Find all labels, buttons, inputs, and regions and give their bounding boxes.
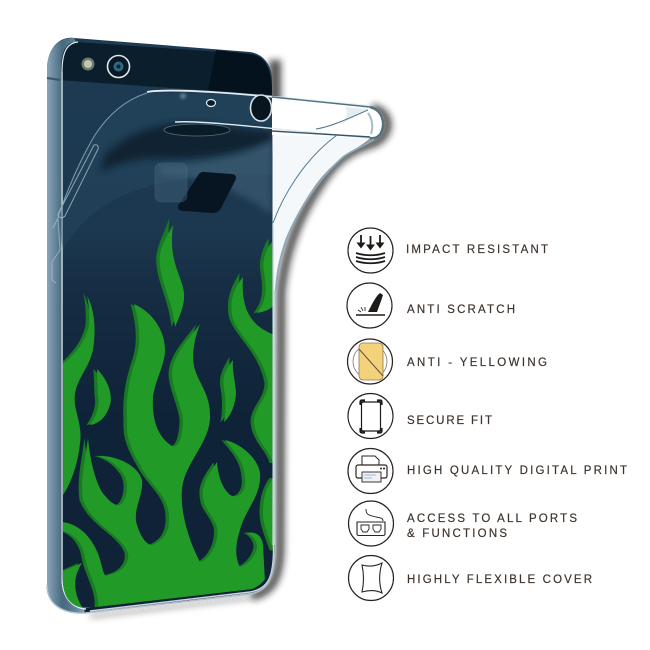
feature: secure fit (348, 394, 492, 438)
flames dark layer (63, 218, 273, 608)
flap shadow on phone (100, 122, 272, 172)
flap tint (58, 202, 72, 249)
flames light layer (63, 225, 273, 608)
phone with clear case (47, 38, 387, 625)
feature: anti yellowing (348, 339, 547, 384)
feature: access to all ports: ACCESS TO ALL PORTS (407, 513, 577, 525)
feature: anti scratch (347, 283, 515, 328)
side button cover (52, 145, 98, 283)
feature: anti scratch: ANTI SCRATCH (407, 304, 515, 316)
feature: impact resistant (348, 228, 548, 273)
lighter panel reflection (160, 140, 272, 215)
case drop shadow (90, 60, 387, 616)
camera lens (108, 56, 130, 78)
slot in case (164, 124, 230, 136)
side frame (47, 38, 85, 613)
feature: high quality digital print: HIGH QUALITY DIGITAL PRINT (407, 465, 627, 477)
flap curved left edge (58, 93, 147, 218)
reflected case corner (155, 163, 187, 202)
feature: high quality digital print (348, 448, 627, 494)
feature: access to all ports (348, 501, 577, 546)
small hole ring (206, 100, 216, 106)
right case edge (90, 225, 274, 611)
flash (82, 58, 94, 70)
case flap on phone (58, 122, 272, 249)
camera hole ring (250, 95, 272, 121)
feature: access to all ports: & FUNCTIONS (407, 528, 507, 540)
feature: highly flexible cover: HIGHLY FLEXIBLE COVER (407, 574, 592, 586)
top glass band (58, 41, 272, 95)
feature: impact resistant: IMPACT RESISTANT (406, 244, 548, 256)
flames pattern (63, 218, 273, 608)
white flap outside phone (272, 134, 370, 545)
flap top band (147, 91, 384, 290)
features list (347, 228, 627, 600)
phone body (47, 38, 275, 613)
feature: highly flexible cover (348, 556, 592, 600)
camera cutout shadow (178, 172, 236, 213)
feature: secure fit: SECURE FIT (407, 415, 492, 427)
feature: anti yellowing: ANTI - YELLOWING (407, 357, 547, 369)
